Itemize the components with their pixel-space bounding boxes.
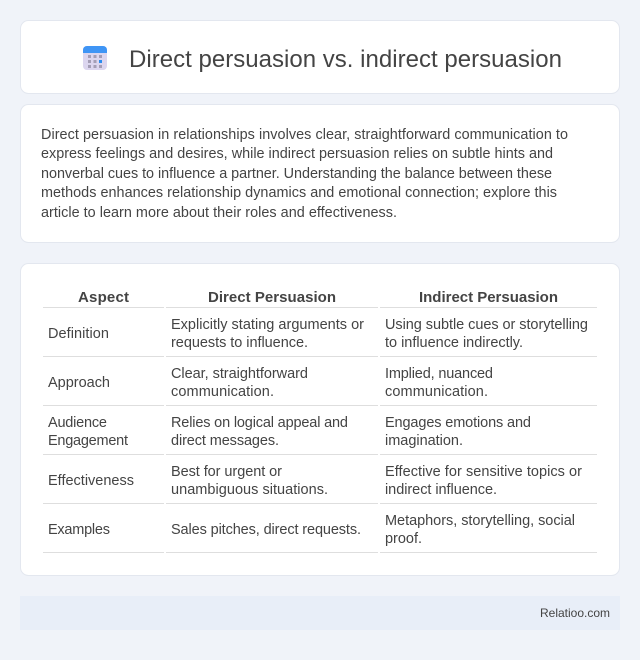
row: approach: communication. (171, 384, 274, 400)
row: approach: Approach (48, 375, 110, 391)
row: effectiveness: Best for urgent or (171, 464, 282, 480)
table header row (78, 289, 558, 306)
table header row: Indirect Persuasion (419, 289, 558, 306)
text block: introduction paragraph: methods enhances relationship dynamics and emotional connection; explore this (41, 185, 557, 201)
row: effectiveness (48, 464, 582, 498)
text block: introduction paragraph (41, 127, 568, 221)
row: examples (48, 513, 575, 547)
row: definition: Explicitly stating arguments or (171, 317, 364, 333)
row: audience engagement: Audience (48, 415, 107, 431)
row: audience engagement: direct messages. (171, 433, 279, 449)
text block: introduction paragraph: express feelings and desires, while indirect persuasion relies on subtle hints and (41, 146, 553, 162)
table header row: Aspect (78, 289, 129, 306)
table header row: Direct Persuasion (208, 289, 336, 306)
text block: introduction paragraph: article to learn more about their roles and effectiveness. (41, 205, 397, 221)
text block: introduction paragraph: nonverbal cues to influence a partner. Understanding the balance between these (41, 166, 552, 182)
row: definition: requests to influence. (171, 335, 308, 351)
row: definition: Definition (48, 326, 109, 342)
row: audience engagement: Relies on logical appeal and (171, 415, 348, 431)
footer bar (20, 596, 620, 630)
row: approach: Clear, straightforward (171, 366, 308, 382)
row: approach: communication. (385, 384, 488, 400)
row: approach: Implied, nuanced (385, 366, 493, 382)
panel: title header (20, 20, 620, 94)
title: Direct persuasion vs. indirect persuasion (129, 46, 562, 73)
row: effectiveness: unambiguous situations. (171, 482, 328, 498)
row: audience engagement: imagination. (385, 433, 463, 449)
row: definition: Using subtle cues or storytelling (385, 317, 588, 333)
row: audience engagement (48, 415, 531, 449)
icon: calendar (83, 46, 107, 70)
row: audience engagement: Engages emotions and (385, 415, 531, 431)
row: effectiveness: indirect influence. (385, 482, 497, 498)
text block: introduction paragraph: Direct persuasion in relationships involves clear, straightforward communication to (41, 127, 568, 143)
row: approach (48, 366, 493, 400)
row: definition: to influence indirectly. (385, 335, 523, 351)
row: examples: Examples (48, 522, 110, 538)
row: effectiveness: Effectiveness (48, 473, 134, 489)
row: examples: proof. (385, 531, 422, 547)
row: effectiveness: Effective for sensitive topics or (385, 464, 582, 480)
footer source text: Relatioo.com (540, 606, 610, 620)
row: examples: Metaphors, storytelling, social (385, 513, 575, 529)
row: examples: Sales pitches, direct requests. (171, 522, 361, 538)
row: audience engagement: Engagement (48, 433, 128, 449)
panel: introduction (20, 104, 620, 242)
row: definition (48, 317, 588, 351)
panel: comparison table (20, 264, 620, 576)
